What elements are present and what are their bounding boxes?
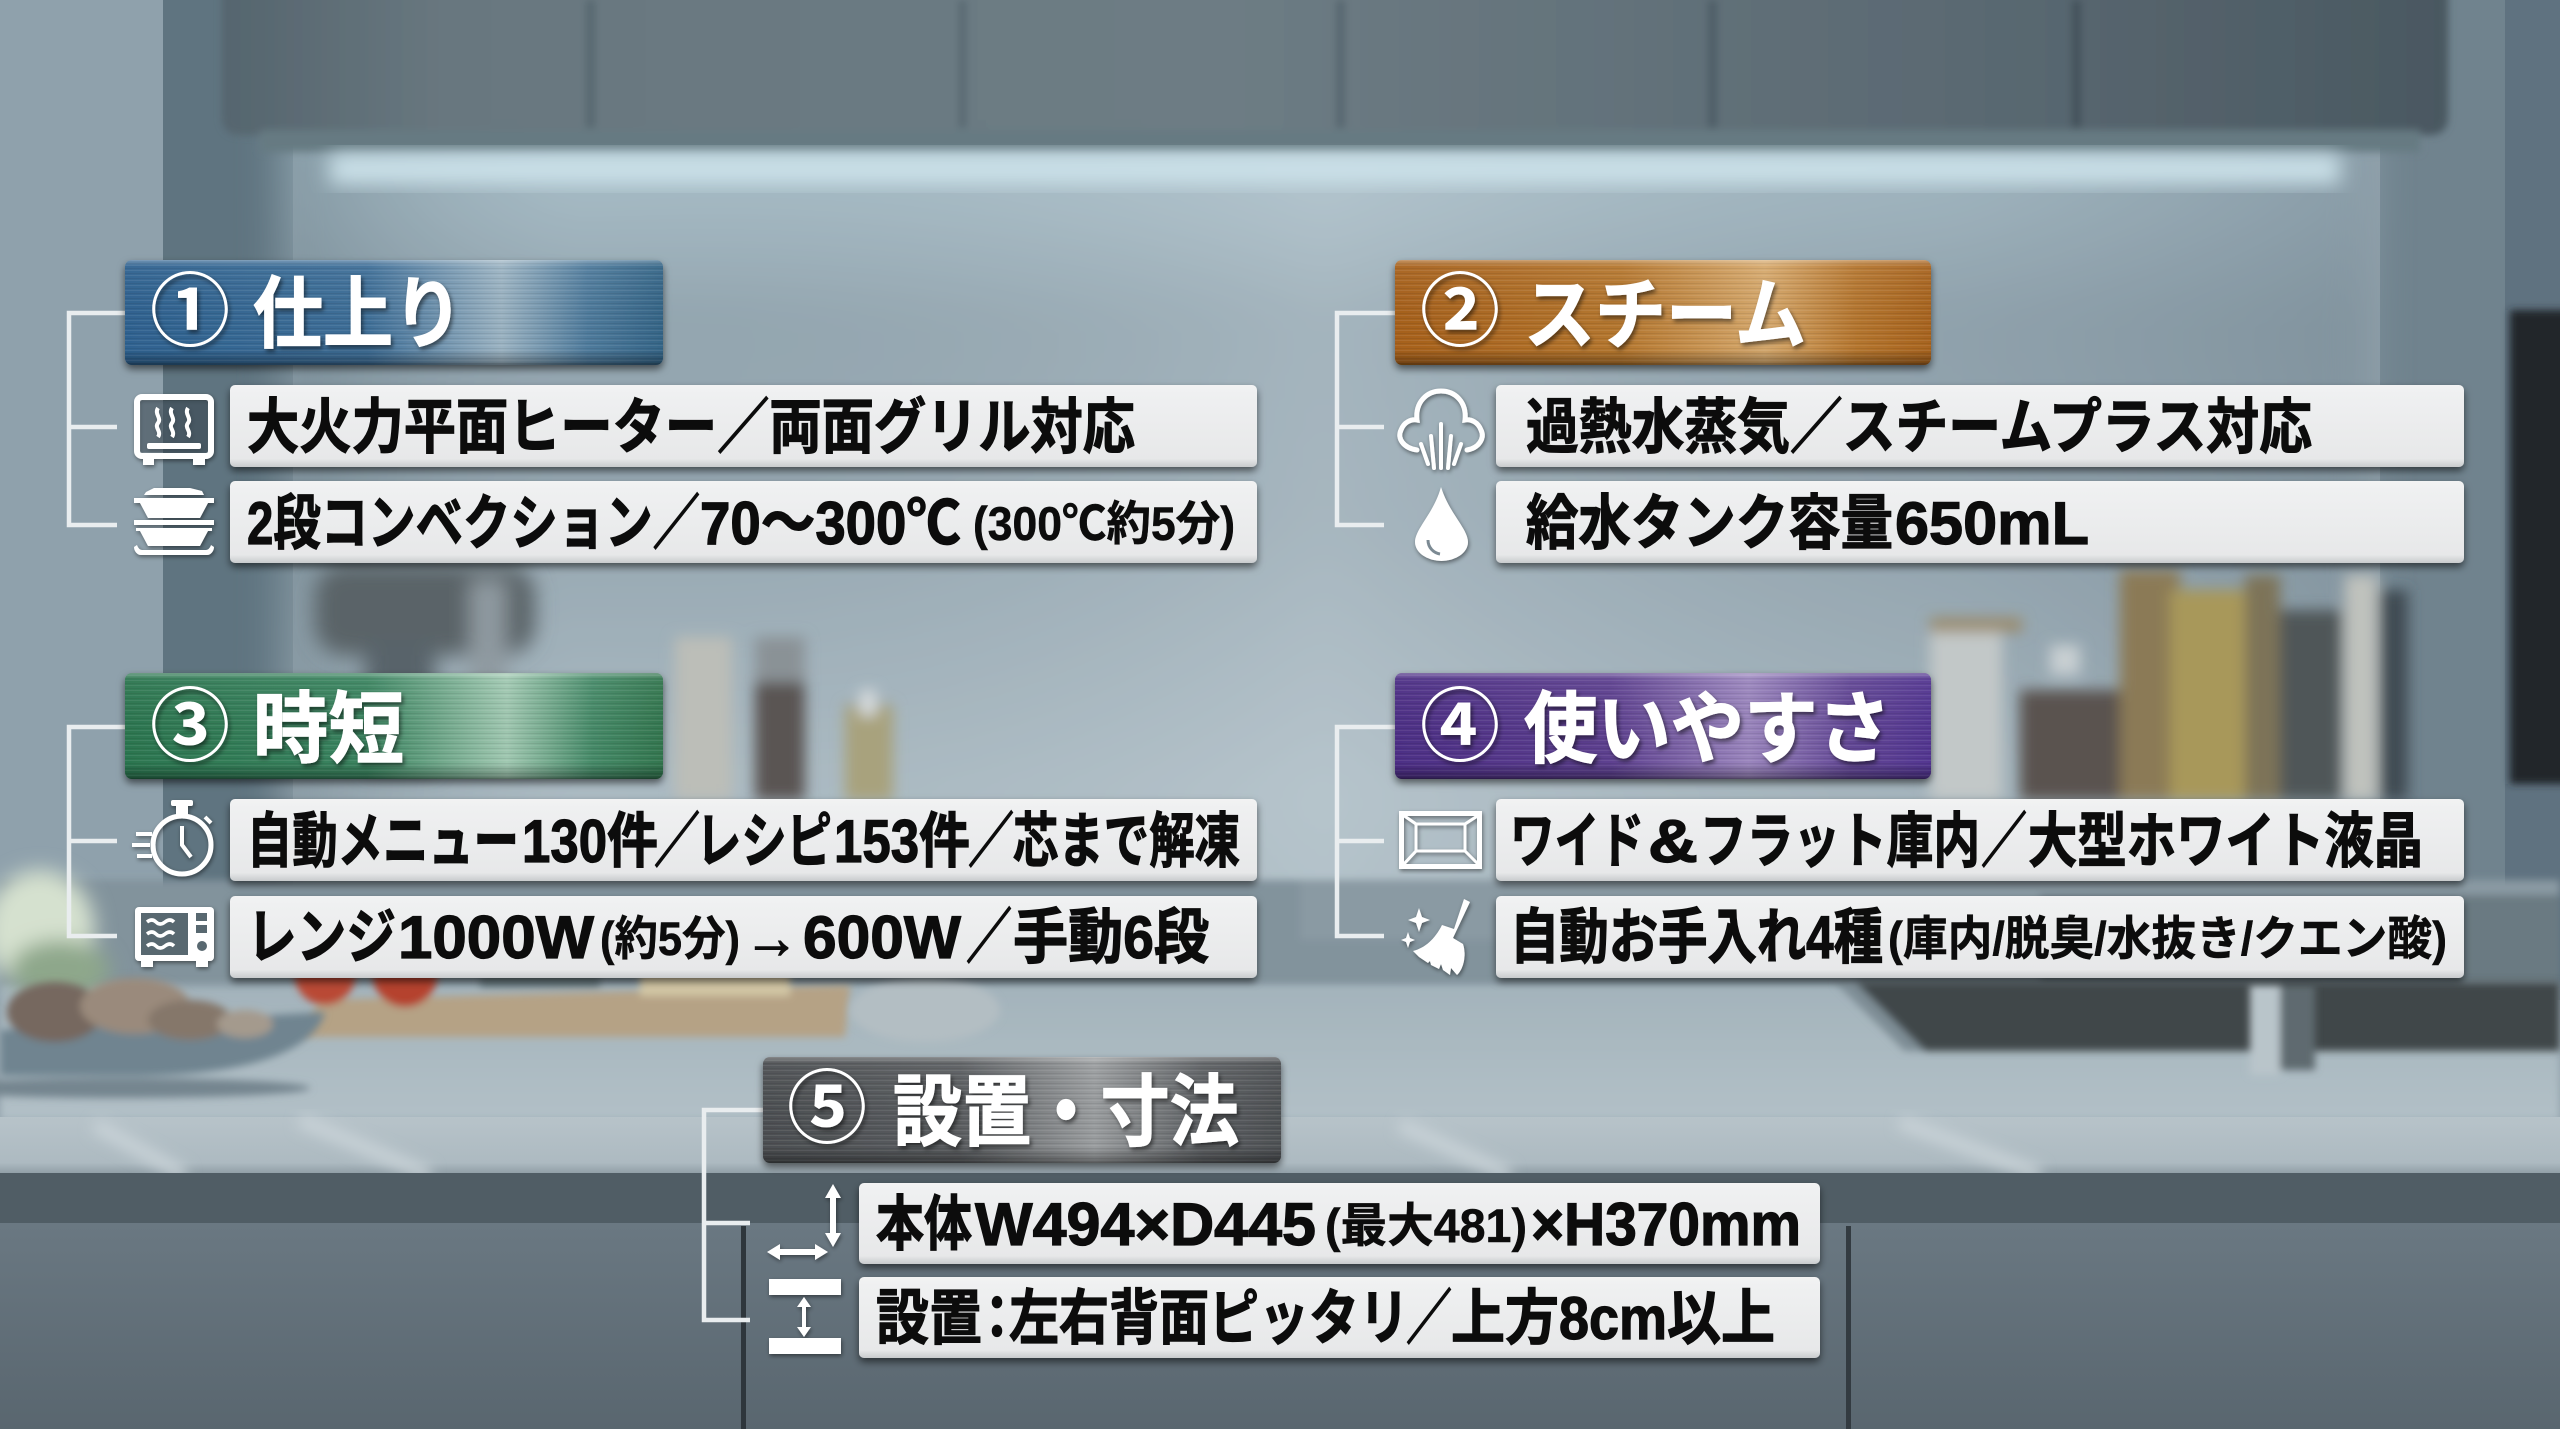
icon: microwave bbox=[135, 907, 214, 967]
text row 5-1: 本体 bbox=[876, 1191, 972, 1258]
text row 3-2: → bbox=[744, 904, 799, 971]
text row 2-2: 650mL bbox=[1895, 490, 2089, 557]
text row 4-1: フラット庫内 bbox=[1700, 808, 1980, 875]
text row 1-2: 70～300℃ bbox=[700, 490, 961, 557]
greens bbox=[0, 870, 110, 1000]
text row 3-1: 自動メニュー bbox=[247, 808, 519, 875]
panel 5: 設置・寸法 bbox=[704, 1057, 1820, 1358]
right column bbox=[2380, 0, 2560, 1000]
icon: water drop bbox=[1415, 487, 1468, 561]
heading text 4: 使いやすさ bbox=[1524, 685, 1891, 773]
text row 3-2: (約5分) bbox=[600, 912, 740, 965]
text row 5-2: ／ bbox=[1406, 1285, 1452, 1352]
heading 5 bbox=[763, 1057, 1281, 1163]
icon: stopwatch bbox=[132, 800, 211, 874]
icon: wide flat interior bbox=[1402, 814, 1480, 866]
text row 5-2: 上方8cm以上 bbox=[1451, 1285, 1775, 1352]
marble veins bbox=[95, 1120, 2040, 1175]
heading text 1: 仕上り bbox=[253, 270, 463, 358]
text row 3-1: 130件 bbox=[522, 808, 658, 875]
counter front edge bbox=[0, 1117, 2560, 1174]
text row 3-2: レンジ bbox=[247, 904, 396, 971]
text row 1-1: 大火力平面ヒーター／両面グリル対応 bbox=[247, 394, 1135, 461]
text row 3-1: 153件 bbox=[834, 808, 970, 875]
backsplash wall bbox=[280, 120, 2370, 1020]
heading text 1: ① bbox=[150, 268, 230, 356]
icon: steam cloud bbox=[1400, 391, 1482, 468]
heading text 4: ④ bbox=[1420, 682, 1500, 772]
connector 5 bbox=[704, 1110, 763, 1320]
connector 3 bbox=[69, 727, 125, 936]
counter back band bbox=[0, 880, 2560, 990]
text row 5-2: 左右背面ピッタリ bbox=[1009, 1285, 1409, 1352]
under-cabinet light bbox=[330, 154, 2340, 184]
heading text 5: ⑤ bbox=[787, 1064, 867, 1154]
text row 3-1: ／ bbox=[654, 808, 700, 875]
text row 3-2: 1000W bbox=[398, 904, 594, 971]
text row 5-2: ： bbox=[972, 1285, 1022, 1352]
lower cabinet band bbox=[0, 1173, 2560, 1223]
heading text 5: 設置・寸法 bbox=[893, 1068, 1239, 1156]
lower cabinets bbox=[0, 1223, 2560, 1429]
icon: broom with sparkles bbox=[1401, 899, 1470, 975]
heading text 5 bbox=[787, 1064, 1239, 1156]
text row 5-1: ×H370mm bbox=[1531, 1191, 1801, 1258]
text row 4-1: ワイド bbox=[1510, 808, 1644, 875]
sink bbox=[1835, 982, 2560, 1051]
panel 1: 仕上り bbox=[69, 260, 1257, 563]
text row 3-2: 600W bbox=[803, 904, 961, 971]
text row 3-1 bbox=[247, 808, 1240, 875]
text row 5-2: 設置 bbox=[876, 1285, 982, 1352]
counter top bbox=[0, 985, 2560, 1120]
heading 1 bbox=[125, 260, 663, 365]
text row 4-2: (庫内/脱臭/水抜き/クエン酸) bbox=[1888, 912, 2447, 965]
faucet bbox=[2250, 985, 2315, 1075]
text row 2-1: 過熱水蒸気／スチームプラス対応 bbox=[1526, 394, 2312, 461]
text row 2-2: 給水タンク容量 bbox=[1526, 490, 1893, 557]
text row 4-1 bbox=[1510, 808, 2423, 875]
text row 5-1: (最大481) bbox=[1325, 1199, 1527, 1252]
cutting board and food bbox=[295, 943, 850, 1037]
text row 3-1: ／ bbox=[968, 808, 1014, 875]
text row 3-2: ／ bbox=[966, 904, 1012, 971]
bar row 5-1 bbox=[859, 1183, 1820, 1264]
text row 4-2 bbox=[1510, 904, 2447, 971]
icon: oven with heat bbox=[137, 397, 211, 465]
left column bbox=[163, 0, 293, 1000]
text row 4-2: 自動お手入れ4種 bbox=[1510, 904, 1883, 971]
connector 4 bbox=[1337, 727, 1395, 936]
text row 5-2 bbox=[876, 1285, 1775, 1352]
bar row 5-2 bbox=[859, 1277, 1820, 1358]
spice jars bbox=[675, 637, 893, 800]
heading text 2: ② bbox=[1420, 268, 1500, 356]
icon: stacked dishes bbox=[134, 488, 214, 555]
text row 1-2: (300℃約5分) bbox=[973, 497, 1235, 550]
text row 1-2: 2段コンベクション／ bbox=[247, 490, 700, 557]
text row 5-1 bbox=[876, 1191, 1801, 1258]
text row 4-1: ／ bbox=[1981, 808, 2027, 875]
connector 1 bbox=[69, 313, 125, 525]
text row 4-1: 大型ホワイト液晶 bbox=[2028, 808, 2423, 875]
bar row 4-1 bbox=[1496, 799, 2464, 881]
heading text 2: スチーム bbox=[1524, 271, 1806, 359]
text row 3-1: レシピ bbox=[696, 808, 832, 875]
text row 3-1: 芯まで解凍 bbox=[1013, 808, 1240, 875]
bar row 1-1 bbox=[230, 385, 1257, 467]
bar row 4-2 bbox=[1496, 896, 2464, 978]
heading 4 bbox=[1395, 673, 1931, 779]
text row 1-2 bbox=[247, 490, 1235, 557]
connector 2 bbox=[1337, 313, 1395, 525]
icon: dimension arrows bbox=[767, 1184, 841, 1260]
bar row 2-1 bbox=[1496, 385, 2464, 467]
right shelf bottles and books bbox=[1930, 570, 2408, 800]
bar row 3-2 bbox=[230, 896, 1257, 978]
plate of mushrooms bbox=[0, 978, 325, 1098]
heading text 3: 時短 bbox=[253, 685, 404, 773]
text row 5-1: W494×D445 bbox=[975, 1191, 1316, 1258]
text row 3-2: 手動6段 bbox=[1013, 904, 1209, 971]
glass bowl bbox=[850, 978, 1000, 1042]
oven at right bbox=[2510, 310, 2560, 784]
heading 3 bbox=[125, 673, 663, 779]
panel 2: スチーム bbox=[1337, 260, 2464, 563]
panel 4: 使いやすさ bbox=[1337, 673, 2464, 978]
heading text 1 bbox=[150, 268, 463, 358]
bar row 1-2 bbox=[230, 481, 1257, 563]
bar row 3-1 bbox=[230, 799, 1257, 881]
heading text 3: ③ bbox=[150, 682, 230, 772]
text row 3-2 bbox=[247, 904, 1209, 971]
mixer bbox=[315, 565, 535, 770]
heading text 3 bbox=[150, 682, 404, 773]
heading 2 bbox=[1395, 260, 1931, 365]
bar row 2-2 bbox=[1496, 481, 2464, 563]
upper cabinets bbox=[222, 0, 2448, 152]
heading text 2 bbox=[1420, 268, 1806, 359]
left side wall bbox=[0, 0, 163, 1000]
panel 3: 時短 bbox=[69, 673, 1257, 978]
icon: clearance bars bbox=[769, 1279, 841, 1354]
text row 4-1: & bbox=[1648, 808, 1698, 875]
